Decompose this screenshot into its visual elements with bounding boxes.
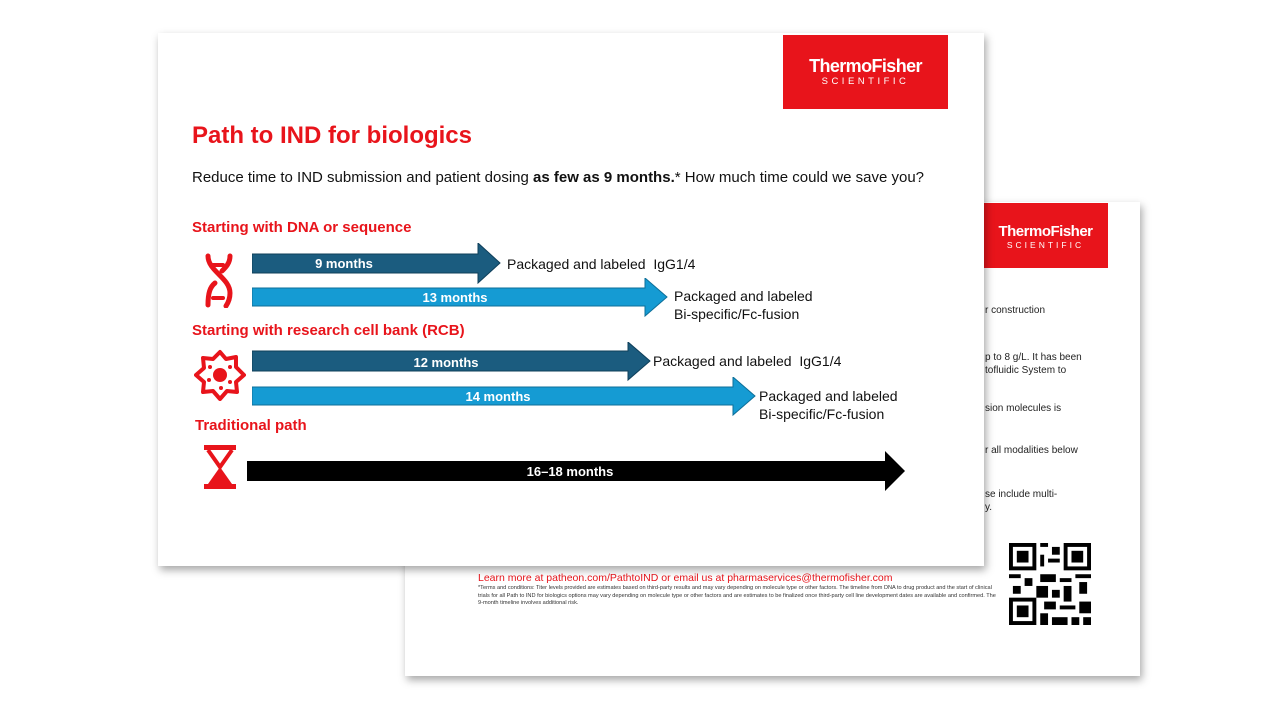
arrow: 9 months	[252, 243, 501, 284]
label: IgG1/4 DNA: Packaged and labeled IgG1/4	[507, 256, 695, 272]
arrow: 16-18 months: 16–18 months	[527, 464, 613, 479]
back text fragments: sion molecules is	[985, 403, 1061, 414]
arrow: 16-18 months	[247, 451, 905, 491]
icon: DNA	[206, 254, 232, 308]
back logo: SCIENTIFIC	[1007, 240, 1084, 250]
back text fragments: tofluidic System to	[985, 365, 1066, 376]
label: IgG1/4 RCB: Packaged and labeled IgG1/4	[653, 353, 841, 369]
label: bispecific DNA: Packaged and labeled	[674, 288, 813, 304]
back text fragments: se include multi-	[985, 489, 1057, 500]
subtitle: Reduce time to IND submission and patient dosing as few as 9 months.* How much time could we save you?	[192, 169, 924, 186]
heading: DNA: Starting with DNA or sequence	[192, 219, 411, 236]
arrow: 13 months: 13 months	[422, 290, 488, 305]
arrow: 9 months: 9 months	[315, 256, 373, 271]
panel: front card	[158, 33, 984, 566]
QR code	[1009, 543, 1091, 625]
label: bispecific DNA	[674, 288, 813, 322]
back logo: ThermoFisher	[998, 223, 1093, 240]
footer link: Learn more at patheon.com/PathtoIND or email us at pharmaservices@thermofisher.com	[478, 572, 893, 584]
front logo: ThermoFisher	[809, 56, 922, 76]
arrow: 14 months	[252, 377, 756, 416]
arrow: 12 months: 12 months	[413, 355, 479, 370]
heading: RCB: Starting with research cell bank (RCB)	[192, 322, 465, 339]
label: bispecific RCB: Bi-specific/Fc-fusion	[759, 406, 884, 422]
arrow: 13 months	[252, 278, 668, 318]
icon: cell	[194, 350, 246, 401]
arrow: 14 months: 14 months	[465, 389, 531, 404]
label: bispecific DNA: Bi-specific/Fc-fusion	[674, 306, 799, 322]
icon: hourglass	[204, 445, 236, 489]
label: bispecific RCB	[759, 388, 898, 422]
back logo	[983, 203, 1108, 268]
arrow: 12 months	[252, 342, 651, 382]
front logo: SCIENTIFIC	[822, 76, 909, 87]
back text fragments: p to 8 g/L. It has been	[985, 352, 1082, 363]
heading: traditional: Traditional path	[195, 417, 307, 434]
back text fragments: y.	[985, 502, 992, 513]
back text fragments	[985, 305, 1082, 513]
label: bispecific RCB: Packaged and labeled	[759, 388, 898, 404]
front logo	[783, 35, 948, 109]
title: Path to IND for biologics	[192, 122, 472, 149]
panel: back card	[405, 202, 1140, 676]
terms text: *Terms and conditions: Titer levels provided are estimates based on third-party results and may vary depending on molecule type or other factors. The timeline from DNA to drug product and the start of clinical trials for all Path to IND for biologics options may vary depending on molecule type or other factors and are estimates to be finalized once third-party cell line development dates are available and confirmed. The 9-month timeline involves additional risk.	[478, 585, 996, 606]
back text fragments: r all modalities below	[985, 445, 1078, 456]
back text fragments: r construction	[985, 305, 1045, 316]
